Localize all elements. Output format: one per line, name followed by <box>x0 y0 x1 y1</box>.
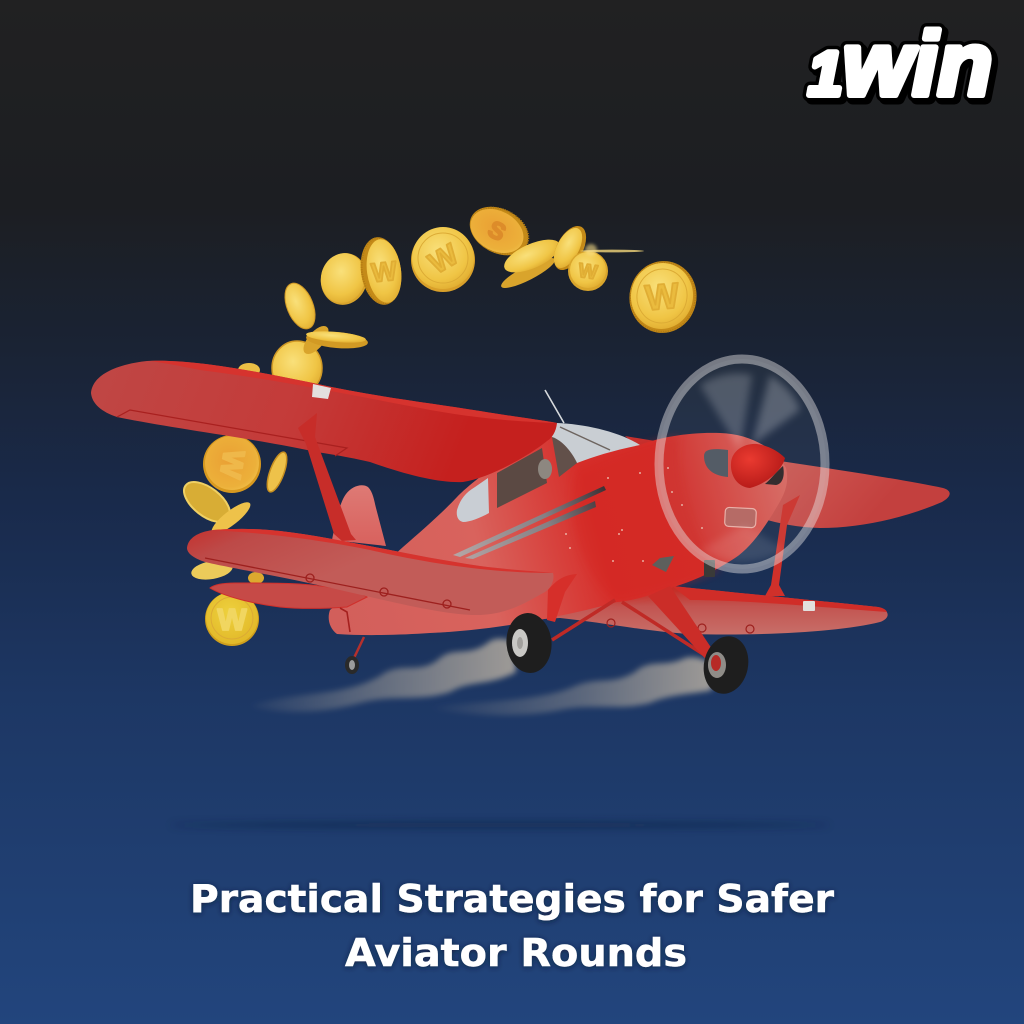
right cowl vent <box>765 466 784 485</box>
coin: behind wing <box>272 341 322 395</box>
right upper wing <box>755 461 950 528</box>
coin: yellow W <box>205 592 259 646</box>
tail stabilizer <box>210 583 367 608</box>
coin: centre face: W <box>423 238 465 281</box>
coin: orange M: W <box>213 447 250 481</box>
upper left wing <box>91 361 557 482</box>
coin: small thin <box>547 221 593 275</box>
title: Practical Strategies for Safer <box>190 877 834 921</box>
wing root behind canopy <box>625 436 655 450</box>
coin: large right <box>624 256 702 338</box>
title <box>190 877 834 975</box>
right wheel <box>698 632 754 698</box>
antenna <box>545 390 564 423</box>
main gear left strut <box>547 574 577 622</box>
canopy brace <box>560 427 610 450</box>
coin: edge on <box>299 322 369 358</box>
coin: orange tilted <box>461 197 537 265</box>
coin: yellow W: W <box>217 602 247 637</box>
fuselage <box>329 424 787 635</box>
coin: left pair <box>315 235 406 310</box>
ground shadow <box>170 822 830 828</box>
tail hinge detail <box>340 608 350 632</box>
coin: flat tilted <box>208 498 254 538</box>
left wheel <box>504 611 554 675</box>
coin: sliver <box>238 363 260 377</box>
coin sparkle <box>580 244 644 256</box>
1win logo: 1win <box>808 15 992 115</box>
exhaust <box>704 560 715 577</box>
right wing hinges <box>607 619 754 633</box>
wing struts front <box>765 495 800 596</box>
propeller spinner <box>731 444 785 488</box>
cowling details <box>652 449 784 577</box>
lower wing right and centre underside <box>430 586 888 634</box>
lower wing panel line with hinges <box>205 558 470 610</box>
coin: under wing <box>190 557 234 583</box>
coins behind the plane <box>91 197 950 975</box>
lower wing red edge <box>213 529 553 573</box>
cockpit canopy <box>550 423 640 463</box>
smoke trails <box>250 639 712 715</box>
left cowl vent <box>704 449 728 477</box>
blade blur upper <box>700 373 752 450</box>
propeller ring <box>659 359 825 569</box>
side vent <box>652 556 674 572</box>
upper wing panel line <box>117 410 347 456</box>
coin: small W <box>568 251 608 291</box>
front window <box>552 437 577 477</box>
coin: left pair: W <box>370 256 399 288</box>
rivets <box>565 467 703 562</box>
tail fin <box>332 485 386 546</box>
middle window <box>497 448 547 508</box>
cabin windows <box>457 437 577 522</box>
red biplane <box>91 359 950 698</box>
blade blur lower <box>700 525 785 561</box>
wing white tip patch <box>803 601 815 611</box>
coin: large right: W <box>643 275 681 318</box>
coin: thin left <box>279 279 321 333</box>
coin: tilted <box>177 474 237 530</box>
wing strut <box>298 413 356 541</box>
coin: thin strut coin <box>263 450 291 494</box>
1win logo: 1win <box>808 15 992 115</box>
lower wing right highlight <box>672 586 887 612</box>
coin arc upper <box>238 197 702 395</box>
wing white patch <box>312 384 331 399</box>
coin: flat stack <box>498 233 564 293</box>
lower left wing <box>187 529 554 615</box>
rear window <box>457 478 489 522</box>
fuselage stripes <box>453 486 606 559</box>
propeller disc <box>658 359 826 569</box>
coin: orange tilted: S <box>483 216 510 247</box>
coin: small W: W <box>577 260 599 284</box>
body shading <box>572 436 720 602</box>
gear braces <box>552 600 717 663</box>
lower scoop <box>724 507 756 528</box>
upper wing red edge <box>150 361 557 423</box>
coin: centre face <box>411 227 475 292</box>
pilot silhouette <box>538 459 552 479</box>
coin: orange M <box>203 435 261 493</box>
title: Aviator Rounds <box>345 931 687 975</box>
coin arc lower <box>177 435 291 646</box>
main gear right strut <box>648 586 722 666</box>
coin: sliver <box>248 572 264 584</box>
tail wheel <box>345 637 364 674</box>
